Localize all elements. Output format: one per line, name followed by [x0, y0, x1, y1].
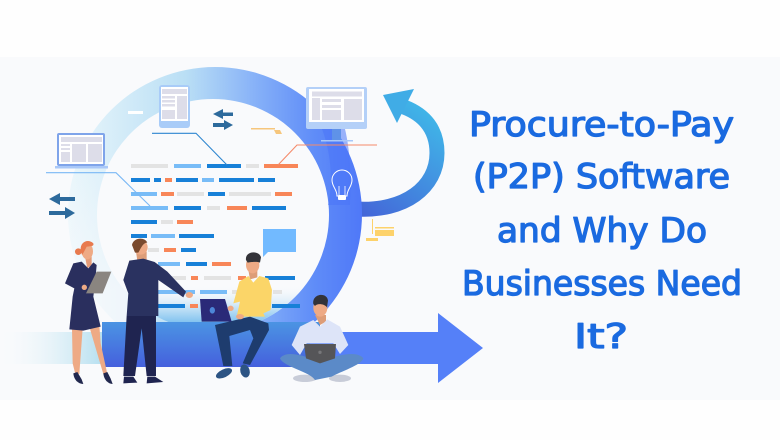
orange key marks — [251, 128, 282, 134]
icon: laptop — [55, 133, 108, 168]
title: Procure-to-Pay — [469, 105, 734, 145]
icon: tablet — [159, 85, 190, 128]
base band — [102, 322, 320, 367]
person: woman with tablet — [65, 241, 113, 384]
lower disc gradient — [156, 290, 302, 322]
icon: top left and right arrows — [213, 109, 233, 130]
image background — [0, 57, 780, 400]
icon: lightbulb — [332, 170, 352, 200]
white dash — [128, 111, 143, 114]
title: and Why Do — [497, 211, 707, 251]
person: man sitting cross-legged — [280, 295, 363, 382]
yellow key marks — [366, 219, 394, 241]
infographic canvas — [19, 67, 740, 384]
title: (P2P) Software — [473, 157, 730, 197]
person: standing man — [123, 239, 193, 383]
person: seated man with laptop — [200, 252, 272, 381]
icon: left and right arrows — [49, 193, 75, 219]
connector line: tablet — [152, 133, 227, 165]
circular ring — [60, 67, 362, 361]
title — [462, 105, 742, 357]
code bars — [131, 164, 300, 308]
chat bubble — [263, 229, 296, 257]
big curved arrow — [356, 89, 437, 209]
connector line: monitor — [278, 145, 377, 165]
title: Businesses Need — [462, 264, 742, 304]
connector line: laptop — [46, 173, 150, 206]
left tail of base band — [0, 332, 103, 364]
large forward arrow — [310, 313, 483, 383]
title: It? — [574, 317, 628, 357]
icon: monitor — [306, 87, 367, 205]
